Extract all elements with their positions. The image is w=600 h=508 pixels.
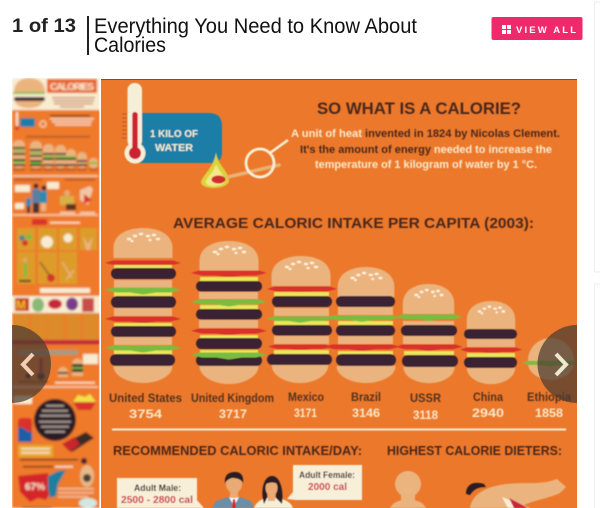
callout: adult female: 2000 cal [308, 482, 347, 493]
calorie values [128, 408, 564, 420]
calorie definition text: needed to increase the [434, 144, 552, 156]
thumbnail calorie section [15, 112, 94, 138]
thumbnail exercise cards [17, 219, 97, 293]
chart heading: AVERAGE CALORIC INTAKE PER CAPITA (2003): [173, 215, 534, 232]
thumbnail obesity map: 67% [25, 482, 45, 493]
title [94, 15, 417, 57]
sidebar panel: bottom [594, 284, 600, 508]
callout: adult male: Adult Male: [134, 483, 181, 494]
country labels: Brazil [351, 392, 381, 404]
country labels: USSR [410, 393, 442, 405]
thumbnail people [13, 179, 98, 216]
burger: Brazil [324, 267, 400, 383]
water label [150, 129, 198, 152]
callout: adult female [287, 465, 362, 500]
callout: adult male: 2500 - 2800 cal [121, 495, 193, 506]
thumbnail restaurant logos: M [16, 298, 26, 312]
icon: match [228, 165, 279, 177]
water diagram [122, 83, 288, 188]
calorie definition text: temperature of 1 kilogram of water by 1 °C. [315, 159, 537, 171]
burger: United Kingdom [191, 241, 267, 384]
burger: Ethiopia [522, 338, 578, 380]
sumo wrestler figure [466, 479, 566, 508]
sidebar panel: top [594, 2, 600, 272]
calorie definition text [291, 128, 560, 171]
burger: Mexico [267, 256, 337, 383]
thumbnail burgers [13, 140, 98, 176]
country labels: United Kingdom [191, 393, 274, 405]
highest dieters heading: HIGHEST CALORIE DIETERS: [387, 443, 562, 458]
thumbnail restaurant logos [12, 296, 100, 313]
calorie values: 2940 [472, 406, 504, 420]
country labels: Ethiopia [527, 392, 572, 404]
slide counter: 1 of 13 [12, 16, 76, 37]
country labels: United States [109, 393, 182, 405]
title divider [87, 16, 89, 55]
title: Calories [94, 34, 166, 57]
calorie values: 3171 [294, 406, 317, 420]
thumbnail header: CALORIES [50, 82, 94, 93]
recommended intake heading: RECOMMENDED CALORIC INTAKE/DAY: [113, 443, 362, 458]
view all button: VIEW ALL [516, 25, 576, 36]
adult female figure [254, 476, 293, 508]
burger: United States [105, 228, 181, 383]
calorie values: 3754 [129, 407, 162, 421]
thumbnail snack section [14, 394, 96, 457]
thumbnail nutrition table [12, 313, 100, 388]
title: Everything You Need to Know About [94, 15, 417, 38]
calorie values: 1858 [535, 406, 563, 420]
country labels [109, 392, 572, 405]
country labels: Mexico [288, 392, 324, 404]
country labels: China [473, 392, 504, 404]
icon: flame [201, 152, 229, 188]
callout: adult male [117, 478, 204, 508]
view all button [492, 17, 582, 40]
athlete figure [390, 471, 426, 508]
icon: thermometer [122, 83, 146, 164]
left carousel arrow [12, 325, 51, 403]
thumbnail header [12, 78, 100, 110]
calorie definition text: It's the amount of energy [300, 144, 432, 156]
burger: China [460, 301, 522, 384]
calorie values: 3717 [219, 407, 247, 421]
thumbnail strip [12, 78, 100, 508]
icon: magnifying glass [246, 140, 288, 177]
calorie definition text: A unit of heat [291, 128, 362, 140]
water label: 1 KILO OF [150, 128, 199, 140]
calorie definition text: invented in 1824 by Nicolas Clement. [365, 128, 560, 140]
blue water box [140, 113, 222, 163]
calorie values: 3146 [352, 406, 380, 420]
callout: adult female: Adult Female: [299, 470, 355, 481]
calorie values: 3118 [413, 408, 438, 422]
adult male figure [212, 472, 254, 508]
water label: WATER [155, 142, 193, 154]
thumbnail obesity map [18, 458, 97, 508]
right carousel arrow [538, 325, 577, 403]
burger: USSR [396, 284, 462, 383]
main slide image [101, 78, 578, 508]
calorie definition heading: SO WHAT IS A CALORIE? [317, 99, 521, 118]
